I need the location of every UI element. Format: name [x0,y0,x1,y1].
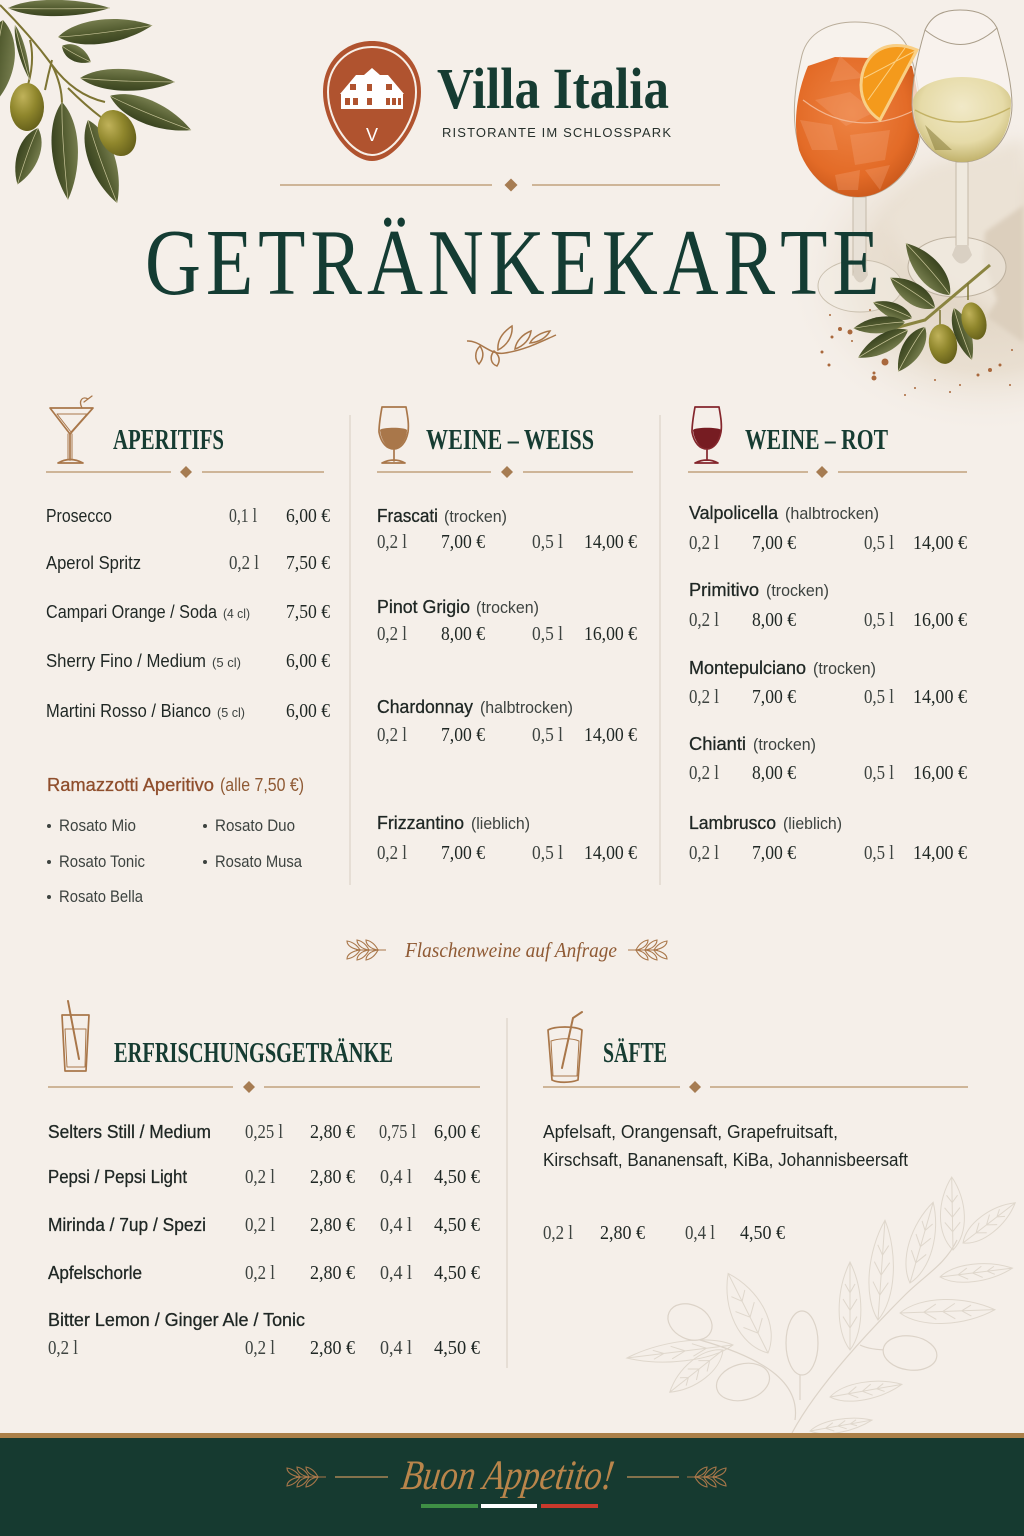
row: Apfelschorle: Apfelschorle [48,1263,142,1283]
row: Frascati [377,506,637,553]
subheading: Ramazzotti [47,775,304,795]
panel: juices [543,1012,968,1244]
row: Pepsi: 2,80 € [310,1166,355,1188]
list: Ramazzotti variants: Rosato Bella [59,887,143,906]
juice list: Kirschsaft, Bananensaft, KiBa, Johannisbeersaft [543,1150,908,1170]
section rule [688,466,967,478]
row: Martini: 6,00 € [286,700,330,722]
row: Montepulciano: 14,00 € [913,686,967,708]
row: Chardonnay: Chardonnay [377,697,473,717]
row: Primitivo: 16,00 € [913,609,967,631]
row: Mirinda: Mirinda / 7up / Spezi [48,1215,206,1235]
subheading: Ramazzotti: Ramazzotti Aperitivo [47,775,214,795]
row: Martini: Martini Rosso / Bianco [46,701,211,721]
orange slice [861,45,917,120]
row: Prosecco: 0,1 l [229,505,257,527]
row: Primitivo [689,580,967,631]
row: Prosecco: Prosecco [46,506,112,526]
row: Pinot Grigio: Pinot Grigio [377,597,470,617]
row: Chianti [689,734,967,784]
row: Pinot Grigio: (trocken) [476,598,539,617]
row: Apfelschorle [48,1262,480,1284]
row: Pepsi: Pepsi / Pepsi Light [48,1167,187,1187]
row: Mirinda: 2,80 € [310,1214,355,1236]
panel: red wines [688,407,967,864]
icon: tall glass with straw [62,1001,89,1071]
row: Selters: Selters Still / Medium [48,1122,211,1142]
row: Valpolicella: 0,2 l [689,532,719,554]
row: Montepulciano: Montepulciano [689,658,806,678]
logo tagline: RISTORANTE IM SCHLOSSPARK [442,125,671,140]
row: Lambrusco: 7,00 € [752,842,796,864]
row: Selters: 0,75 l [379,1121,416,1143]
panel: white wines [377,407,637,864]
row: Lambrusco: 0,2 l [689,842,719,864]
row: Sherry [46,650,330,672]
row: Chardonnay: 0,2 l [377,724,407,746]
row: Montepulciano: 7,00 € [752,686,796,708]
row: Bitter Lemon: Bitter Lemon / Ginger Ale / Tonic [48,1310,305,1330]
row: Frizzantino: Frizzantino [377,813,464,833]
row: Chianti: 16,00 € [913,762,967,784]
header divider [280,178,720,192]
logo badge: V [366,125,378,145]
row: Chardonnay: (halbtrocken) [480,698,573,717]
olive sprig [852,236,991,377]
row: Pinot Grigio: 0,2 l [377,623,407,645]
row: Aperol Spritz: 0,2 l [229,552,259,574]
row: Chianti: (trocken) [753,735,816,754]
row: Mirinda [48,1214,480,1236]
row: Pinot Grigio: 16,00 € [584,623,637,645]
list: Ramazzotti variants: Rosato Duo [215,816,295,835]
row: Frizzantino: 0,2 l [377,842,407,864]
row: Valpolicella: (halbtrocken) [785,504,879,523]
illustration: drinks on linen with olive sprig [785,10,1024,435]
juice prices: 0,2 l [543,1222,573,1244]
section rule [46,466,324,478]
row: Pepsi: 0,4 l [380,1166,412,1188]
heading: APERITIFS [113,424,224,456]
row: Aperol Spritz [46,552,330,574]
icon: juice glass with straw [548,1012,582,1082]
list: Ramazzotti variants: Rosato Mio [59,816,136,835]
row: Aperol Spritz: 7,50 € [286,552,330,574]
row: Bitter Lemon [48,1310,480,1359]
row: Bitter Lemon: 0,2 l [48,1337,78,1359]
row: Valpolicella: 0,5 l [864,532,894,554]
panel: soft drinks [48,1001,480,1359]
section rule [48,1081,480,1093]
row: Frizzantino: 0,5 l [532,842,563,864]
row: Prosecco [46,505,330,527]
row: Lambrusco [689,813,967,864]
row: Frizzantino: 14,00 € [584,842,637,864]
row: Apfelschorle: 4,50 € [434,1262,480,1284]
white wine glass [908,10,1012,297]
juice list: Apfelsaft, Orangensaft, Grapefruitsaft, [543,1122,838,1142]
row: Lambrusco: 14,00 € [913,842,967,864]
row: Frizzantino: (lieblich) [471,814,530,833]
column dividers [350,415,660,1368]
logo badge [323,41,421,161]
row: Frascati: 0,5 l [532,531,563,553]
row: Campari [46,601,330,623]
row: Martini [46,700,330,722]
juice prices [543,1222,785,1244]
row: Pepsi: 4,50 € [434,1166,480,1188]
row: Chianti: Chianti [689,734,746,754]
row: Primitivo: (trocken) [766,581,829,600]
icon: white wine glass [379,407,408,463]
row: Mirinda: 4,50 € [434,1214,480,1236]
row: Martini: (5 cl) [217,705,245,720]
row: Mirinda: 0,4 l [380,1214,412,1236]
row: Bitter Lemon: 2,80 € [310,1337,355,1359]
row: Selters: 2,80 € [310,1121,355,1143]
heading: SÄFTE [603,1037,667,1069]
icon: cocktail glass [50,396,93,463]
row: Primitivo: Primitivo [689,580,759,600]
juice prices: 0,4 l [685,1222,715,1244]
row: Chianti: 8,00 € [752,762,796,784]
row: Selters: 6,00 € [434,1121,480,1143]
juice prices: 2,80 € [600,1222,645,1244]
spice specks [820,309,1013,396]
row: Pinot Grigio: 8,00 € [441,623,485,645]
note: bottled wines on request: Flaschenweine auf Anfrage [404,938,617,962]
row: Bitter Lemon: 4,50 € [434,1337,480,1359]
row: Aperol Spritz: Aperol Spritz [46,553,141,573]
row: Campari: Campari Orange / Soda [46,602,218,622]
panel: aperitifs [46,396,330,906]
illustration: olive branch top left [0,0,196,207]
row: Chardonnay: 14,00 € [584,724,637,746]
row: Primitivo: 8,00 € [752,609,796,631]
row: Lambrusco: (lieblich) [783,814,842,833]
row: Sherry: Sherry Fino / Medium [46,651,206,671]
row: Valpolicella: 7,00 € [752,532,796,554]
row: Campari: 7,50 € [286,601,330,623]
row: Chianti: 0,2 l [689,762,719,784]
row: Chardonnay: 0,5 l [532,724,563,746]
heading: WEINE – ROT [745,424,888,456]
row: Frascati: (trocken) [444,507,507,526]
row: Lambrusco: 0,5 l [864,842,894,864]
row: Valpolicella: 14,00 € [913,532,967,554]
row: Pepsi [48,1166,480,1188]
subheading: Ramazzotti: (alle 7,50 €) [220,775,304,795]
row: Frizzantino [377,813,637,864]
title: GETRÄNKEKARTE [145,210,885,315]
row: Montepulciano: 0,2 l [689,686,719,708]
row: Primitivo: 0,5 l [864,609,894,631]
row: Pinot Grigio: 0,5 l [532,623,563,645]
row: Montepulciano: (trocken) [813,659,876,678]
row: Mirinda: 0,2 l [245,1214,275,1236]
row: Pinot Grigio [377,597,637,645]
icon: red wine glass [692,407,721,463]
row: Pepsi: 0,2 l [245,1166,275,1188]
row: Selters: 0,25 l [245,1121,283,1143]
illustration: faint olive branch watermark [626,1177,1021,1437]
row: Sherry: 6,00 € [286,650,330,672]
row: Campari: (4 cl) [223,606,250,621]
row: Bitter Lemon: 0,2 l [245,1337,275,1359]
row: Valpolicella [689,503,967,554]
section rule [543,1081,968,1093]
juice prices: 4,50 € [740,1222,785,1244]
row: Montepulciano: 0,5 l [864,686,894,708]
row: Prosecco: 6,00 € [286,505,330,527]
row: Apfelschorle: 2,80 € [310,1262,355,1284]
heading: WEINE – WEISS [426,424,594,456]
row: Sherry: (5 cl) [212,655,241,670]
row: Frascati: 14,00 € [584,531,637,553]
list: Ramazzotti variants: Rosato Tonic [59,852,145,871]
spritz glass [794,22,920,312]
list: Ramazzotti variants [47,816,302,906]
list: Ramazzotti variants: Rosato Musa [215,852,302,871]
row: Chardonnay [377,697,637,746]
row: Frascati: 0,2 l [377,531,407,553]
linen and stone surface [785,115,1024,435]
row: Chardonnay: 7,00 € [441,724,485,746]
row: Selters [48,1121,480,1143]
row: Primitivo: 0,2 l [689,609,719,631]
footer band [0,1433,1024,1536]
footer ornaments [287,1467,726,1487]
heading: ERFRISCHUNGSGETRÄNKE [114,1037,393,1069]
logo [323,41,669,161]
logo name: Villa Italia [437,56,669,121]
row: Valpolicella: Valpolicella [689,503,779,523]
footer greeting: Buon Appetito! [399,1452,617,1499]
juice list [543,1122,908,1170]
row: Chianti: 0,5 l [864,762,894,784]
row: Apfelschorle: 0,4 l [380,1262,412,1284]
row: Frizzantino: 7,00 € [441,842,485,864]
ornament: sprig below title [467,326,556,366]
row: Montepulciano [689,658,967,708]
row: Apfelschorle: 0,2 l [245,1262,275,1284]
row: Frascati: Frascati [377,506,438,526]
row: Bitter Lemon: 0,4 l [380,1337,412,1359]
italian flag bars [421,1504,598,1508]
row: Frascati: 7,00 € [441,531,485,553]
row: Lambrusco: Lambrusco [689,813,776,833]
section rule [377,466,633,478]
